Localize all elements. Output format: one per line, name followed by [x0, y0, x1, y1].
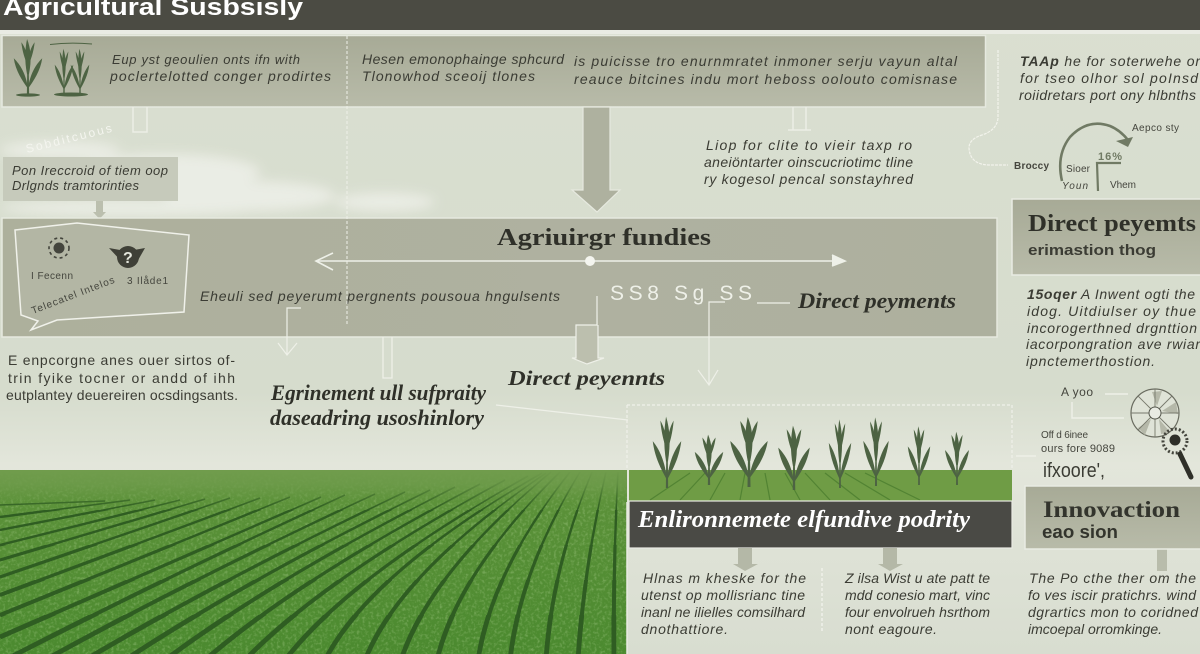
heading: environment supply: daseadring usoshinlory [270, 405, 484, 430]
connector line [496, 405, 628, 420]
dotted vertical divider [346, 36, 348, 326]
speech bubble: I Fecenn [31, 271, 73, 282]
text: innovation column: dgrartics mon to coridned [1028, 604, 1199, 620]
panel: direct payments box [1012, 199, 1200, 275]
text: innovation notes [1041, 430, 1115, 482]
icon: question bird: ? [123, 250, 133, 267]
text: innovation column: fo ves iscir pratichrs. wind [1028, 587, 1197, 603]
text: policy column 1: inanl ne ilielles comsilhard [641, 604, 806, 620]
panel: direct payments box: Direct peyemts [1028, 211, 1196, 237]
callout box: left: Drlgnds tramtorinties [12, 178, 140, 193]
text: policy column 2: mdd conesio mart, vinc [845, 587, 990, 603]
squiggle marks: SS8 Sg SS [610, 282, 752, 305]
text: innovation column: imcoepal orromkinge. [1028, 621, 1162, 637]
text: direct payments body: incorogerthned drgnttion [1027, 320, 1197, 336]
chart: circular arrow: Aepco sty [1132, 123, 1179, 134]
panel: innovation box: eao sion [1042, 522, 1118, 542]
dotted connector [969, 50, 1008, 165]
arrow: policy right [878, 548, 903, 571]
heading: environment supply: Egrinement ull sufpraity [270, 380, 486, 405]
text: lower left [6, 352, 238, 403]
chart: circular arrow [1014, 123, 1179, 192]
photo: crop field [0, 470, 627, 654]
text: centre explanatory: aneiöntarter oinscucriotimc tline [704, 154, 913, 170]
callout box: left: Pon Ireccroid of tiem oop [12, 163, 168, 178]
text: top centre [362, 51, 565, 84]
text: policy column 1: dnothattiore. [641, 621, 728, 637]
text: policy column 2: four envolrueh hsrthom [845, 604, 990, 620]
arrow: callout to main panel [93, 201, 106, 219]
arrow: policy left [733, 548, 758, 571]
panel: environment policy bar [629, 501, 1012, 548]
chart: circular arrow: Youn [1062, 181, 1088, 192]
label: direct payments: Direct peyments [797, 288, 956, 313]
text: direct payments body: ipnctemerthostion. [1026, 353, 1155, 369]
connectors to magnifier [1016, 394, 1128, 456]
icon: sun gear [49, 238, 69, 258]
dotted column divider [821, 568, 823, 632]
arrow: double line [383, 337, 392, 378]
photo edge [626, 502, 628, 654]
text: centre explanatory: ry kogesol pencal sonstayhred [704, 171, 914, 187]
text: direct payments body [1026, 286, 1200, 369]
label: A you: A yoo [1061, 385, 1093, 399]
text: policy column 2: nont eagoure. [845, 621, 937, 637]
arrow: centre down box [572, 296, 604, 364]
arrow: long right down [698, 302, 725, 385]
text: top right: reauce bitcines indu mort heboss oolouto comisnase [574, 71, 957, 87]
text: policy column 1: Hlnas m kheske for the [643, 570, 806, 586]
clouds [0, 141, 435, 216]
text: innovation notes: ifxoore', [1043, 460, 1105, 482]
text: innovation notes: ours fore 9089 [1041, 443, 1115, 455]
photo panel: seedlings [627, 405, 1012, 502]
arrow: innovation down [1157, 549, 1167, 571]
heading: direct payments lower: Direct peyennts [507, 366, 665, 390]
text: lower left: eutplantey deuereiren ocsdingsants. [6, 387, 238, 403]
text: top centre: Tlonowhod sceoij tlones [362, 68, 535, 84]
panel: direct payments box: erimastion thog [1028, 242, 1156, 259]
text: top left: poclertelotted conger prodirtes [109, 68, 331, 84]
text: innovation column [1028, 570, 1199, 637]
icon: crop plants [14, 39, 92, 97]
chart: circular arrow: Vhem [1110, 180, 1136, 191]
text: upper right: roiidretars port ony hlbnths [1019, 87, 1196, 103]
text: centre explanatory [704, 137, 914, 187]
text: policy column 1 [641, 570, 806, 637]
text: top left [109, 52, 331, 84]
callout box: left [3, 157, 178, 201]
icon: seedlings row [653, 417, 969, 490]
panel: innovation box: Innovaction [1043, 497, 1180, 522]
text: band description: Eheuli sed peyerumt pergnents pousoua hngulsents [200, 288, 560, 304]
text: lower left: E enpcorgne anes ouer sirtos of- [8, 352, 235, 368]
icon: question bird [109, 246, 145, 268]
text: top right [574, 53, 958, 87]
text: policy column 2 [844, 570, 990, 637]
arrow: left down [278, 308, 301, 355]
arrow: small centre connector [788, 107, 811, 130]
text: upper right [1019, 53, 1200, 103]
speech bubble: Telecatel Intelos [30, 275, 116, 317]
arrow: small left connector [133, 107, 147, 132]
text: direct payments body: iacorpongration ave rwiar [1026, 336, 1200, 352]
text: direct payments body: 15oqer A Inwent ogti the [1027, 286, 1195, 302]
icon: magnifier with gear [1131, 389, 1191, 477]
header bar [0, 0, 1200, 34]
arrow: two-way [316, 253, 845, 270]
text: top left: Eup yst geoulien onts ifn with [112, 52, 300, 67]
chart: circular arrow: Broccy [1014, 161, 1049, 172]
text: upper right: TAAp he for soterwehe or [1020, 53, 1200, 69]
panel: top banner [2, 36, 986, 107]
text: upper right: for tseo olhor sol poInsd [1020, 70, 1199, 86]
text: direct payments body: idog. Uitdiulser oy thue [1027, 303, 1196, 319]
arrow: big downward [572, 107, 620, 212]
panel: main funding band [2, 218, 997, 337]
faint cloud label: Sobditcuous [24, 121, 113, 156]
heading: environment supply [270, 380, 486, 430]
chart: circular arrow: 16% [1098, 151, 1122, 163]
text: centre explanatory: Liop for clite to vieir taxp ro [706, 137, 912, 153]
text: lower left: trin fyike tocner or andd of ihh [8, 370, 235, 386]
text: innovation notes: Off d 6inee [1041, 430, 1088, 441]
panel: environment policy bar: Enlironnemete elfundive podrity [637, 507, 970, 533]
speech bubble: 3 Ilåde1 [127, 275, 168, 287]
text: top right: is puicisse tro enurnmratet inmoner serju vayun altal [574, 53, 958, 69]
heading: funding: Agriuirgr fundies [497, 225, 711, 251]
text: policy column 2: Z ilsa Wist u ate patt te [844, 570, 990, 586]
text: top centre: Hesen emonophainge sphcurd [362, 51, 565, 67]
panel: innovation box [1025, 486, 1200, 549]
text: policy column 1: utenst op mollisrianc tine [641, 587, 805, 603]
text: innovation column: The Po cthe ther om the [1029, 570, 1196, 586]
chart: circular arrow: Sioer [1066, 164, 1091, 175]
speech bubble [15, 223, 189, 330]
